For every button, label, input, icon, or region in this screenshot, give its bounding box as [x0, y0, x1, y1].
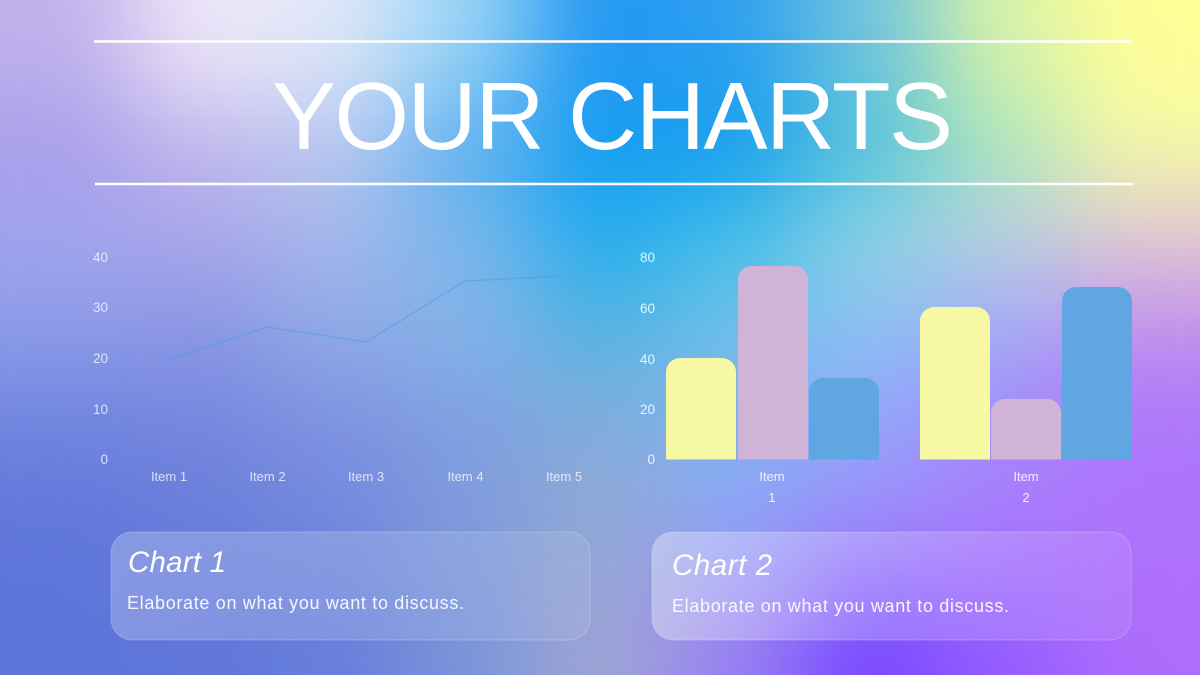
bar chart y axis labels: 60	[640, 301, 655, 316]
bar chart x axis labels: Item	[1013, 469, 1039, 484]
chart 2 description: Elaborate on what you want to discuss.	[672, 596, 1009, 616]
chart 1 description: Elaborate on what you want to discuss.	[127, 593, 464, 613]
bar chart x axis labels: 1	[768, 490, 776, 505]
bar chart x axis labels: 2	[1022, 490, 1030, 505]
bar chart y axis labels: 0	[647, 452, 655, 467]
line chart y axis labels	[93, 250, 108, 467]
line chart y axis labels: 0	[100, 452, 108, 467]
line chart y axis labels: 40	[93, 250, 108, 265]
data line	[169, 276, 564, 360]
panel: chart 2	[652, 532, 1131, 640]
bars: item 2	[920, 287, 1132, 460]
chart 2 heading: Chart 2	[672, 549, 772, 582]
line chart	[93, 250, 582, 484]
line chart y axis labels: 20	[93, 351, 108, 366]
bar chart y axis labels: 80	[640, 250, 655, 265]
bar chart x axis labels	[759, 469, 1039, 505]
line chart x axis labels: Item 1	[151, 469, 187, 484]
line chart y axis labels: 30	[93, 300, 108, 315]
bars: item 1	[666, 266, 879, 460]
bar chart y axis labels: 20	[640, 402, 655, 417]
panel: chart 1	[111, 532, 590, 640]
line chart y axis labels: 10	[93, 402, 108, 417]
line chart x axis labels	[151, 469, 582, 484]
line chart x axis labels: Item 4	[447, 469, 484, 484]
bar chart x axis labels: Item	[759, 469, 785, 484]
title: YOUR CHARTS	[272, 63, 953, 170]
line chart x axis labels: Item 5	[546, 469, 582, 484]
bar chart y axis labels: 40	[640, 352, 655, 367]
chart 1 heading: Chart 1	[128, 546, 226, 579]
bar chart y axis labels	[640, 250, 655, 467]
bar chart	[640, 250, 1132, 505]
line chart x axis labels: Item 2	[249, 469, 286, 484]
line chart x axis labels: Item 3	[348, 469, 384, 484]
